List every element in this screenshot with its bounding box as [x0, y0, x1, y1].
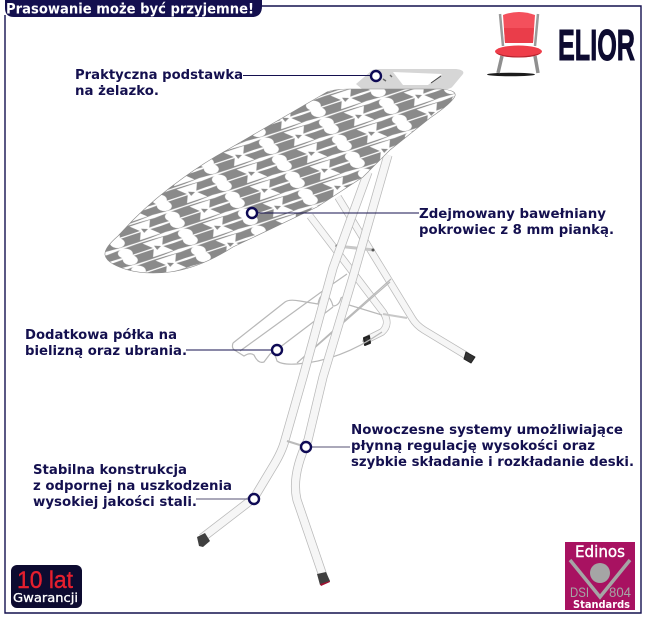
rear leg with hooked foot — [310, 216, 387, 345]
callout: iron rest: na żelazko. — [75, 83, 159, 99]
badge: 10 year warranty: Gwarancji — [13, 591, 78, 605]
link bar — [287, 441, 303, 446]
callout: shelf: bielizną oraz ubrania. — [25, 343, 187, 359]
badge: Edinos DSI 804 Standards: 804 — [609, 584, 631, 600]
callout: cover: pokrowiec z 8 mm pianką. — [419, 222, 614, 238]
callout: shelf: Dodatkowa półka na — [25, 327, 177, 343]
callout: cover — [247, 206, 614, 238]
callout: iron rest — [75, 67, 381, 99]
callout: stable construction: Stabilna konstrukcja — [33, 462, 187, 478]
cross bars — [336, 244, 407, 318]
rubber foot left — [197, 533, 210, 547]
rubber foot right — [317, 572, 330, 586]
callout: stable construction: wysokiej jakości stali. — [33, 494, 197, 510]
callout: stable construction: z odpornej na uszkodzenia — [33, 478, 232, 494]
callout: cover: Zdejmowany bawełniany — [419, 206, 606, 222]
front leg left foot — [202, 172, 368, 538]
badge: 10 year warranty: 10 lat — [17, 567, 73, 594]
badge: Edinos DSI 804 Standards: Edinos — [575, 542, 625, 561]
badge: Edinos DSI 804 Standards — [565, 542, 635, 611]
callout: height adjustment: Nowoczesne systemy umożliwiające — [351, 422, 623, 438]
rear leg with right foot — [338, 197, 475, 363]
logo: chair icon — [487, 12, 542, 76]
header banner: Prasowanie może być przyjemne! — [6, 2, 254, 18]
callout: height adjustment: szybkie składanie i rozkładanie deski. — [351, 454, 634, 470]
badge: 10 year warranty — [11, 565, 82, 608]
callout: height adjustment — [301, 422, 634, 470]
badge: Edinos DSI 804 Standards: Standards — [573, 598, 630, 611]
drying shelf — [232, 274, 391, 364]
front leg right foot — [295, 155, 388, 576]
badge: Edinos DSI 804 Standards: DSI — [570, 584, 589, 600]
board cover — [105, 89, 455, 273]
ironing board illustration — [105, 69, 475, 586]
callout: shelf — [25, 327, 282, 359]
callout: iron rest: Praktyczna podstawka — [75, 67, 243, 83]
callout: stable construction — [33, 462, 259, 510]
iron rest — [356, 69, 463, 89]
callout: height adjustment: płynną regulację wysokości oraz — [351, 438, 595, 454]
